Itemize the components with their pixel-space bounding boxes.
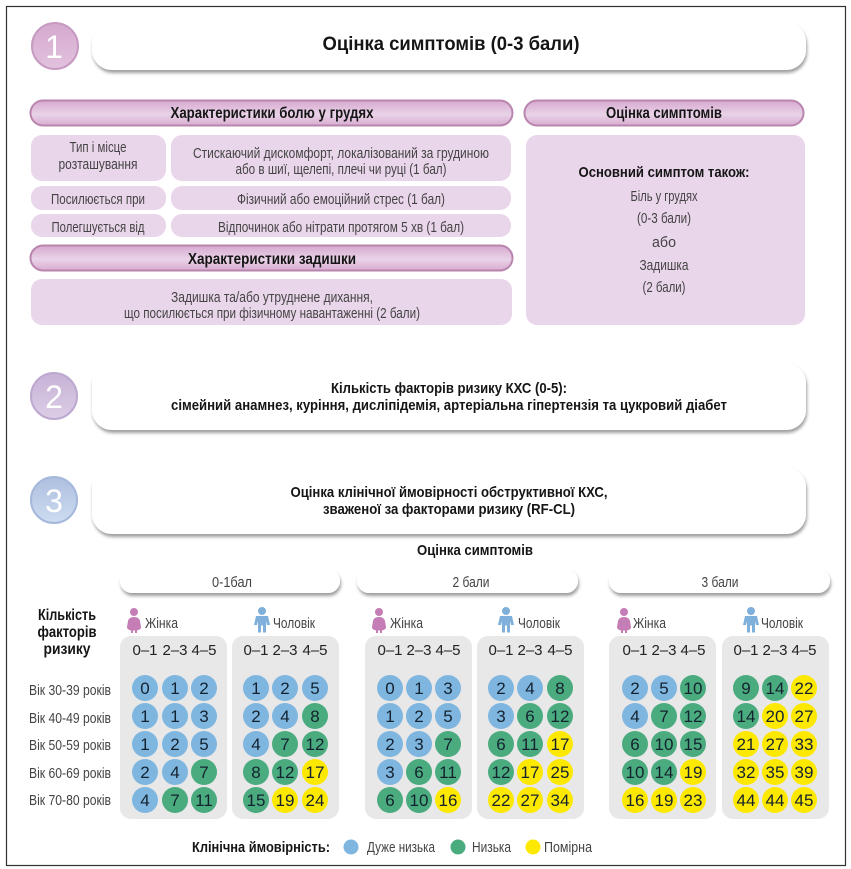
- score header: 2: [357, 569, 578, 593]
- panel: score 0-1, men: 2: [251, 707, 261, 726]
- panel: score 3, men: 27: [795, 707, 813, 726]
- panel: score 2, women: 6: [414, 763, 424, 782]
- panel: score 3, men: 32: [737, 763, 755, 782]
- panel: score 3, men: 27: [766, 735, 784, 754]
- panel: score 2, men: 6: [496, 735, 506, 754]
- panel: score 2, men: 27: [521, 791, 539, 810]
- panel: score 0-1, women: 2: [170, 735, 180, 754]
- heading: symptom score: Оцінка симптомів: [606, 105, 722, 122]
- dyspnea description: [31, 279, 512, 325]
- dyspnea description: Задишка та/або утруднене дихання,: [171, 290, 373, 306]
- panel: chest pain characteristics: [30, 100, 512, 237]
- panel: score 2, men: 0–1: [488, 642, 514, 659]
- panel: score 3, men: 0–1: [733, 642, 759, 659]
- panel: score 3, women: [609, 636, 716, 819]
- label: woman, score 2: Жінка: [390, 616, 424, 632]
- risk factor count label: [38, 607, 97, 658]
- icon: man, score 2: [498, 607, 514, 632]
- row: relieved by: Відпочинок або нітрати протягом 5 хв (1 бал): [218, 220, 464, 236]
- panel: score 0-1, men: 17: [306, 763, 324, 782]
- risk factor count label: ризику: [44, 641, 91, 658]
- panel: score 2, men: 2: [496, 679, 506, 698]
- main symptom text: [526, 135, 805, 325]
- main symptom text: Біль у грудях: [630, 189, 698, 205]
- step 1 badge: 1: [45, 29, 63, 65]
- panel: score 3, men: 20: [766, 707, 784, 726]
- panel: score 0-1, women: 3: [199, 707, 209, 726]
- panel: score 0-1, women: 1: [140, 735, 150, 754]
- symptom score caption: Оцінка симптомів: [417, 542, 533, 559]
- panel: score 2, men: 17: [521, 763, 539, 782]
- panel: score 0-1, men: 4–5: [302, 642, 328, 659]
- panel: score 0-1, men: 5: [310, 679, 320, 698]
- score header: 3: 3 бали: [702, 575, 738, 591]
- panel: score 2, men: 17: [551, 735, 569, 754]
- panel: score 0-1, women: 5: [199, 735, 209, 754]
- step 2 heading: сімейний анамнез, куріння, дисліпідемія, артеріальна гіпертензія та цукровий діабет: [171, 397, 727, 414]
- panel: score 2, men: 4–5: [547, 642, 573, 659]
- legend: clinical likelihood: Дуже низька: [367, 840, 436, 856]
- panel: score 0-1, women: 11: [195, 791, 213, 810]
- panel: score 2, men: 3: [496, 707, 506, 726]
- step 3 badge: 3: [45, 483, 63, 519]
- row: type and location: розташування: [58, 157, 138, 173]
- panel: score 0-1, women: 4: [140, 791, 150, 810]
- panel: score 0-1, women: 0–1: [132, 642, 158, 659]
- panel: score 2, women: 1: [385, 707, 395, 726]
- label: man, score 3: Чоловік: [761, 616, 804, 632]
- legend: clinical likelihood: Помірна: [544, 840, 593, 856]
- heading: dyspnea: Характеристики задишки: [188, 251, 356, 268]
- panel: score 3, women: 14: [655, 763, 673, 782]
- panel: score 0-1, women: 2: [140, 763, 150, 782]
- main symptom text: Задишка: [640, 258, 689, 274]
- panel: score 2, women: 16: [439, 791, 457, 810]
- score header: 0-1: 0-1бал: [212, 575, 252, 591]
- panel: score 0-1, women: 1: [170, 679, 180, 698]
- step 3 badge: [31, 477, 77, 523]
- row: type and location: [31, 135, 511, 181]
- panel: score 2, men: 12: [551, 707, 569, 726]
- panel: score 2, women: 2: [385, 735, 395, 754]
- panel: score 0-1, men: 8: [251, 763, 261, 782]
- panel: score 2, women: 2–3: [406, 642, 432, 659]
- age labels: [29, 683, 111, 809]
- row: aggravated by: Фізичний або емоційний стрес (1 бал): [237, 192, 445, 208]
- panel: score 3, men: 9: [741, 679, 751, 698]
- panel: score 0-1, men: 4: [280, 707, 290, 726]
- panel: score 2, women: 5: [443, 707, 453, 726]
- panel: score 0-1, women: 4: [170, 763, 180, 782]
- panel: score 0-1, men: 2–3: [272, 642, 298, 659]
- icon: woman, score 0-1: [127, 608, 141, 633]
- panel: score 3, men: 14: [766, 679, 784, 698]
- panel: score 3, women: 19: [684, 763, 702, 782]
- panel: score 2, women: [365, 636, 472, 819]
- panel: score 3, women: 12: [684, 707, 702, 726]
- panel: score 0-1, men: 12: [306, 735, 324, 754]
- panel: score 0-1, men: 7: [280, 735, 290, 754]
- score header: 3: [609, 569, 830, 593]
- main symptom text: Основний симптом також:: [578, 164, 750, 181]
- row: relieved by: Полегшується від: [52, 220, 145, 236]
- panel: score 2, women: 4–5: [435, 642, 461, 659]
- step 1 heading: Оцінка симптомів (0-3 бали): [322, 34, 580, 55]
- panel: score 2, men: 8: [555, 679, 565, 698]
- age labels: Вік 40-49 років: [29, 711, 111, 727]
- heading: chest pain: Характеристики болю у грудях: [170, 105, 374, 122]
- panel: symptom score: [524, 100, 805, 325]
- panel: score 2, men: 4: [525, 679, 535, 698]
- panel: score 0-1, men: 15: [247, 791, 265, 810]
- age labels: Вік 50-59 років: [29, 738, 111, 754]
- label: man, score 0-1: Чоловік: [273, 616, 316, 632]
- panel: score 2, men: 22: [492, 791, 510, 810]
- panel: score 0-1, men: 4: [251, 735, 261, 754]
- panel: score 2, men: 11: [521, 735, 539, 754]
- panel: score 2, women: 0–1: [377, 642, 403, 659]
- step 3 heading: зваженої за факторами ризику (RF-CL): [323, 501, 575, 518]
- panel: score 0-1, men: [232, 636, 339, 819]
- panel: score 3, women: 19: [655, 791, 673, 810]
- heading: chest pain: [30, 100, 512, 126]
- panel: score 3, men: 39: [795, 763, 813, 782]
- panel: score 3, men: 14: [737, 707, 755, 726]
- panel: score 2, men: 2–3: [517, 642, 543, 659]
- step 2 heading: [92, 363, 806, 430]
- panel: score 0-1, women: 1: [140, 707, 150, 726]
- panel: score 2, women: 11: [439, 763, 457, 782]
- panel: score 2, women: 10: [410, 791, 428, 810]
- label: woman, score 3: Жінка: [633, 616, 667, 632]
- step 2 badge: 2: [45, 379, 63, 415]
- panel: dyspnea characteristics: [30, 246, 512, 325]
- main symptom text: (0-3 бали): [637, 211, 691, 227]
- panel: score 2, women: 7: [443, 735, 453, 754]
- panel: score 2, women: 3: [414, 735, 424, 754]
- panel: score 2, women: 1: [414, 679, 424, 698]
- score header: 2: 2 бали: [452, 575, 490, 591]
- panel: score 2, men: 34: [551, 791, 569, 810]
- row: aggravated by: [31, 186, 511, 210]
- panel: score 0-1, women: 2: [199, 679, 209, 698]
- label: woman, score 0-1: Жінка: [145, 616, 179, 632]
- step 1 heading: [92, 22, 806, 70]
- panel: score 3, women: 5: [659, 679, 669, 698]
- panel: score 0-1, women: [120, 636, 227, 819]
- age labels: Вік 30-39 років: [29, 683, 111, 699]
- panel: score 3, men: 4–5: [791, 642, 817, 659]
- label: man, score 2: Чоловік: [518, 616, 561, 632]
- main symptom text: або: [652, 235, 676, 251]
- step 1 badge: [32, 23, 78, 69]
- icon: man, score 3: [743, 607, 759, 632]
- icon: man, score 0-1: [254, 607, 270, 632]
- panel: score 3, men: 35: [766, 763, 784, 782]
- panel: score 3, men: 33: [795, 735, 813, 754]
- step 3 heading: Оцінка клінічної ймовірності обструктивної КХС,: [290, 484, 608, 501]
- age labels: Вік 60-69 років: [29, 766, 111, 782]
- dyspnea description: що посилюється при фізичному навантаженні (2 бали): [124, 306, 420, 322]
- legend: clinical likelihood: Клінічна ймовірність:: [192, 839, 330, 856]
- row: type and location: Тип і місце: [70, 140, 126, 156]
- panel: score 2, men: 12: [492, 763, 510, 782]
- panel: score 3, women: 15: [684, 735, 702, 754]
- panel: score 3, men: [722, 636, 829, 819]
- row: type and location: або в шиї, щелепі, плечі чи руці (1 бал): [236, 162, 446, 178]
- panel: score 3, men: 22: [795, 679, 813, 698]
- panel: score 3, women: 4: [630, 707, 640, 726]
- panel: score 0-1, women: 0: [140, 679, 150, 698]
- panel: score 2, men: 25: [551, 763, 569, 782]
- panel: score 3, women: 10: [655, 735, 673, 754]
- panel: score 2, men: [477, 636, 584, 819]
- panel: score 0-1, men: 0–1: [243, 642, 269, 659]
- panel: score 0-1, men: 24: [306, 791, 324, 810]
- panel: score 3, men: 45: [795, 791, 813, 810]
- panel: score 3, women: 16: [626, 791, 644, 810]
- step 2 heading: Кількість факторів ризику КХС (0-5):: [331, 380, 567, 397]
- panel: score 3, women: 2–3: [651, 642, 677, 659]
- row: relieved by: [31, 214, 511, 237]
- panel: score 0-1, men: 12: [276, 763, 294, 782]
- panel: score 3, women: 2: [630, 679, 640, 698]
- panel: score 0-1, men: 8: [310, 707, 320, 726]
- heading: symptom score: [524, 100, 804, 126]
- panel: score 0-1, women: 7: [170, 791, 180, 810]
- panel: score 3, women: 4–5: [680, 642, 706, 659]
- panel: score 0-1, men: 2: [280, 679, 290, 698]
- age labels: Вік 70-80 років: [29, 793, 111, 809]
- panel: score 3, women: 0–1: [622, 642, 648, 659]
- heading: dyspnea: [30, 246, 512, 270]
- panel: score 0-1, women: 7: [199, 763, 209, 782]
- panel: score 0-1, women: 1: [170, 707, 180, 726]
- step 2 badge: [31, 373, 77, 419]
- legend: clinical likelihood: [192, 839, 593, 856]
- panel: score 0-1, women: 4–5: [191, 642, 217, 659]
- panel: score 3, women: 23: [684, 791, 702, 810]
- panel: score 3, men: 44: [766, 791, 784, 810]
- panel: score 2, women: 0: [385, 679, 395, 698]
- panel: score 3, women: 10: [684, 679, 702, 698]
- score header: 0-1: [120, 569, 340, 593]
- icon: woman, score 2: [372, 608, 386, 633]
- panel: score 3, men: 21: [737, 735, 755, 754]
- row: aggravated by: Посилюється при: [51, 192, 145, 208]
- panel: score 2, women: 6: [385, 791, 395, 810]
- risk factor count label: факторів: [38, 624, 97, 641]
- main symptom text: (2 бали): [642, 280, 686, 296]
- icon: woman, score 3: [617, 608, 631, 633]
- panel: score 2, women: 2: [414, 707, 424, 726]
- panel: score 2, men: 6: [525, 707, 535, 726]
- panel: score 3, men: 2–3: [762, 642, 788, 659]
- panel: score 2, women: 3: [443, 679, 453, 698]
- panel: score 0-1, women: 2–3: [162, 642, 188, 659]
- panel: score 2, women: 3: [385, 763, 395, 782]
- panel: score 3, men: 44: [737, 791, 755, 810]
- panel: score 0-1, men: 1: [251, 679, 261, 698]
- panel: score 3, women: 7: [659, 707, 669, 726]
- panel: score 3, women: 6: [630, 735, 640, 754]
- legend: clinical likelihood: Низька: [472, 840, 512, 856]
- panel: score 0-1, men: 19: [276, 791, 294, 810]
- risk factor count label: Кількість: [38, 607, 96, 624]
- step 3 heading: [92, 467, 806, 534]
- row: type and location: Стискаючий дискомфорт, локалізований за грудиною: [193, 146, 489, 162]
- panel: score 3, women: 10: [626, 763, 644, 782]
